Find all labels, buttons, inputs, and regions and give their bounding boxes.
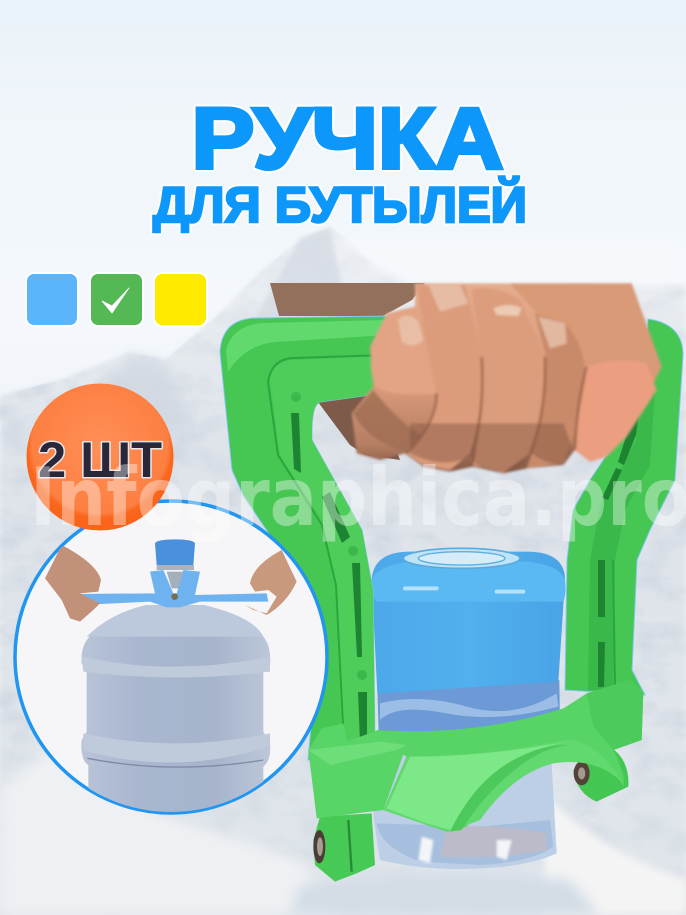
back of hand (510, 283, 662, 462)
finger three (472, 288, 545, 473)
title: РУЧКА (192, 91, 504, 187)
large bottle (81, 605, 270, 812)
hand silhouette (352, 283, 662, 473)
forearm behind handle (270, 283, 425, 460)
swatch: blue (26, 273, 78, 326)
hand fingers (352, 283, 662, 473)
finger two (407, 285, 482, 470)
knuckle shading (407, 357, 587, 453)
left block (308, 723, 407, 818)
glass neck (373, 720, 557, 869)
bottle cap (155, 539, 195, 565)
title: ДЛЯ БУТЫЛЕЙ (153, 176, 527, 233)
right block (587, 680, 643, 750)
green handle arms (220, 316, 683, 760)
swatch: yellow (154, 273, 207, 326)
right arm (565, 319, 683, 695)
title: РУЧКА (192, 91, 504, 187)
cap body (372, 552, 565, 693)
water band (377, 680, 560, 733)
right ear with bolt (573, 747, 628, 802)
bottle with blue cap (371, 548, 566, 869)
thumb / first finger (371, 308, 437, 394)
yoke band (377, 680, 643, 832)
right hand (245, 550, 297, 615)
left foot with bolt (313, 813, 375, 882)
swatch: green selected (90, 273, 143, 326)
finger four (527, 313, 585, 468)
inset circle: bottle carried by two hands (15, 501, 327, 837)
title (153, 91, 527, 233)
green yoke and feet (308, 680, 643, 882)
blue bar and bracket (77, 570, 268, 607)
left arm (220, 316, 388, 760)
background: snowy mountain (0, 227, 686, 915)
colour swatches (26, 273, 207, 326)
left hand (45, 545, 101, 622)
left arm slots (291, 413, 367, 743)
badge: 2 pieces (26, 384, 174, 530)
title: ДЛЯ БУТЫЛЕЙ (153, 176, 527, 233)
badge: 2 pieces: 2 ШТ (38, 432, 162, 488)
